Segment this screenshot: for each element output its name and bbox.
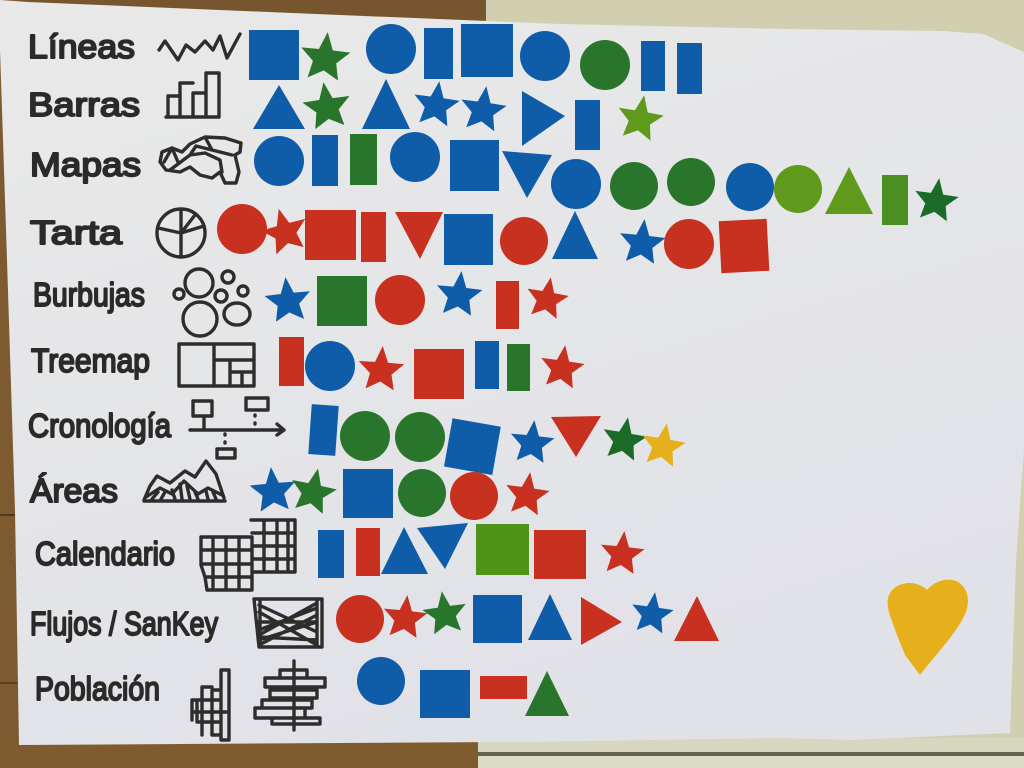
- stickers: Calendario: [318, 523, 646, 579]
- label: Líneas: Líneas: [28, 28, 135, 65]
- row: Barras: [28, 73, 667, 150]
- row: Población: [35, 657, 569, 740]
- label: Burbujas: Burbujas: [33, 276, 145, 313]
- stickers: Treemap: [279, 337, 587, 399]
- icon: bar chart: [166, 73, 219, 117]
- row: Burbujas: [33, 269, 571, 336]
- label: Treemap: Treemap: [31, 342, 150, 379]
- row: Tarta: [30, 203, 769, 273]
- stickers: Población: [357, 657, 569, 718]
- icon: yellow heart: [888, 580, 968, 675]
- row: Mapas: [30, 132, 961, 225]
- icon: treemap: [179, 344, 254, 386]
- stickers: Barras: [253, 78, 667, 150]
- row: Líneas: [28, 24, 702, 94]
- icon: timeline: [190, 398, 284, 458]
- label: Barras: Barras: [28, 86, 140, 123]
- icon: map: [160, 137, 241, 183]
- stickers: Flujos: [336, 588, 719, 645]
- stickers: Burbujas: [263, 269, 571, 329]
- row: Calendario: [35, 520, 646, 590]
- label: Calendario: Calendario: [35, 535, 175, 572]
- row: Flujos / SanKey: [30, 588, 719, 647]
- label: Áreas: Áreas: [30, 472, 118, 509]
- stickers: Líneas: [249, 24, 702, 94]
- label: Tarta: Tarta: [30, 214, 123, 251]
- label: Cronología: Cronología: [28, 407, 172, 444]
- label: Mapas: Mapas: [30, 146, 141, 183]
- label: Flujos / SanKey: Flujos / SanKey: [30, 605, 218, 642]
- icon: calendar heatmap: [201, 520, 295, 590]
- row: Cronología: [28, 398, 689, 475]
- icon: pie chart: [157, 209, 205, 257]
- icon: bubble chart: [174, 269, 250, 336]
- stickers: Áreas: [248, 464, 552, 520]
- row: Áreas: [30, 461, 552, 520]
- row: Treemap: [31, 337, 587, 399]
- stickers: Mapas: [254, 132, 961, 225]
- icon: sankey diagram: [254, 599, 322, 647]
- stickers: Tarta: [217, 203, 769, 273]
- label: Población: Población: [35, 670, 160, 707]
- icon: population pyramid: [192, 661, 325, 740]
- icon: line chart: [159, 34, 240, 60]
- stickers: Cronología: [308, 404, 689, 475]
- icon: area chart: [144, 461, 225, 501]
